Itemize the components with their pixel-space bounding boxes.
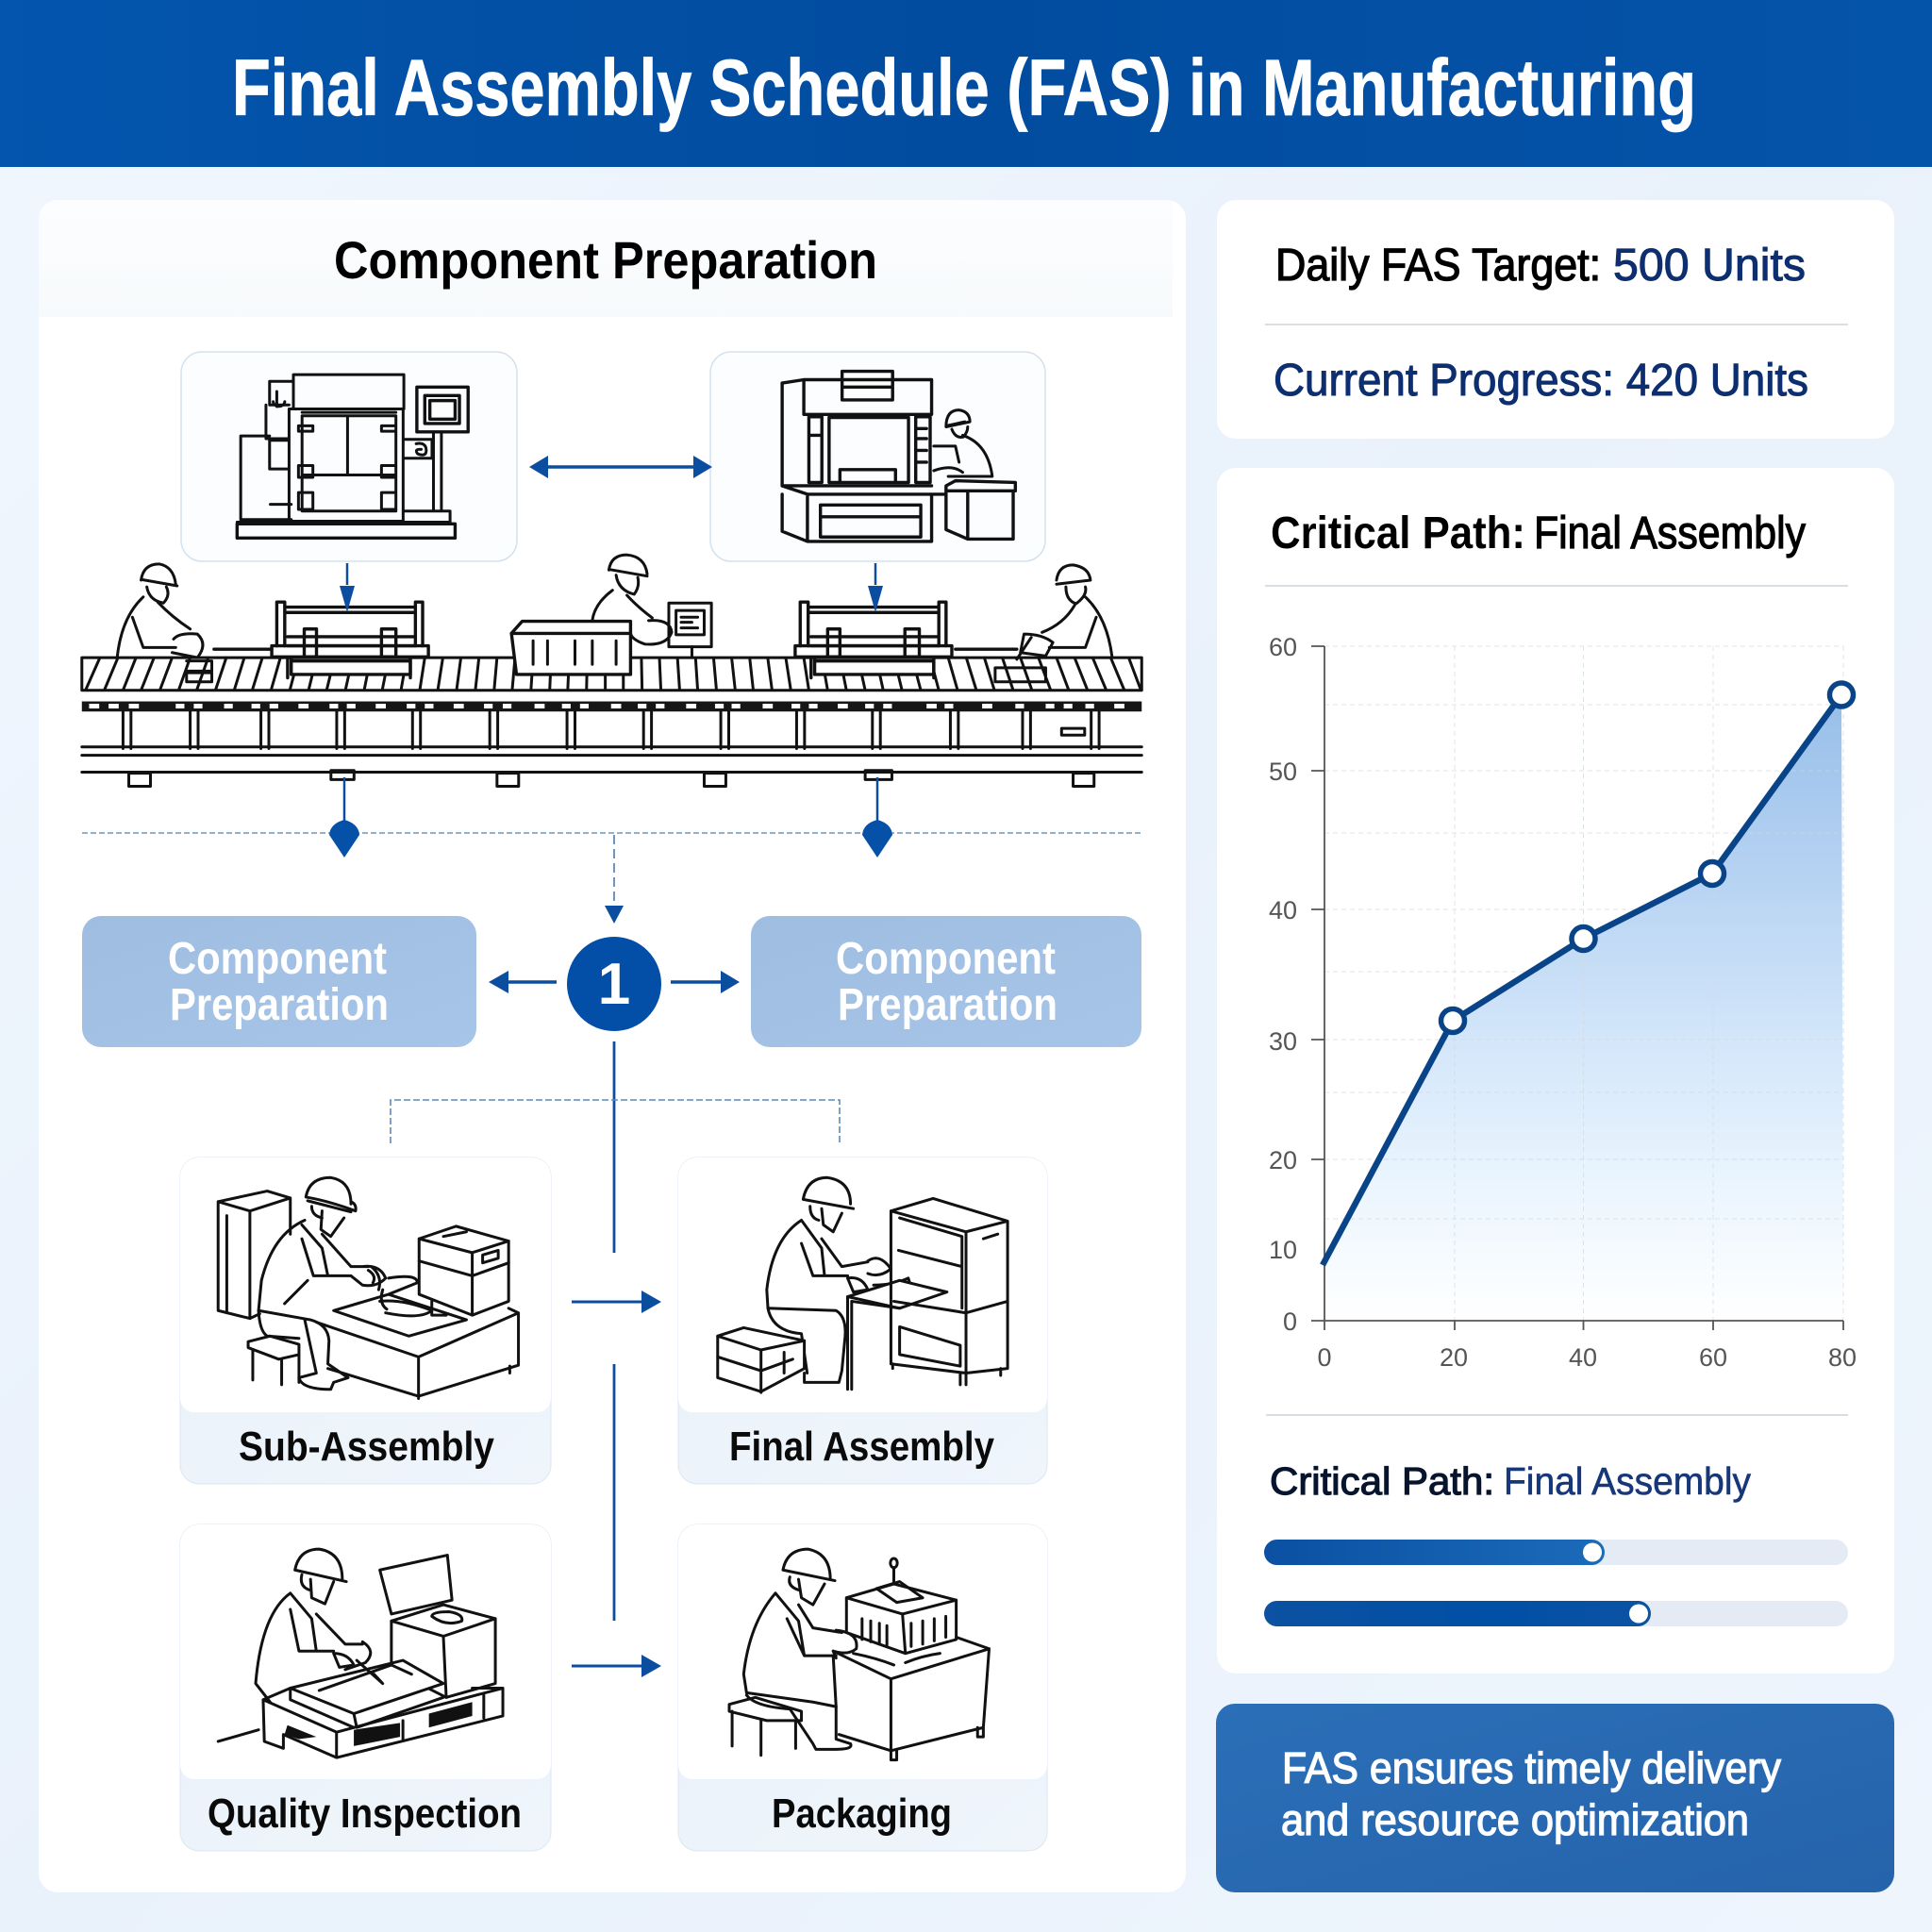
arrow: sub-assembly to final assembly <box>572 1291 661 1313</box>
icon: left machine <box>237 375 468 538</box>
axes <box>1311 646 1843 1330</box>
card: final assembly: Final Assembly <box>729 1424 994 1470</box>
icon: packaging worker <box>729 1549 990 1760</box>
card: sub-assembly: Sub-Assembly <box>239 1424 494 1470</box>
y axis labels <box>1269 633 1297 1336</box>
icon: center crate and monitor <box>511 603 711 675</box>
arrow heads <box>529 456 712 478</box>
box: component preparation left <box>82 916 476 1047</box>
daily target text: Daily FAS Target: <box>1275 241 1601 291</box>
conveyor rail <box>82 702 1141 787</box>
conveyor line art <box>82 372 1141 787</box>
y axis labels: 60 <box>1269 633 1297 661</box>
connector: left drop arrow <box>340 563 355 612</box>
progress heading <box>1270 1459 1751 1503</box>
worker illustrations <box>218 1177 1008 1760</box>
step number badge <box>567 937 661 1031</box>
panel: daily target <box>1217 200 1894 439</box>
box: component preparation right: Preparation <box>838 980 1058 1030</box>
data line <box>1323 694 1841 1265</box>
dashed bracket <box>391 1100 840 1143</box>
y axis labels: 10 <box>1269 1236 1297 1264</box>
daily target text <box>1275 241 1806 291</box>
chart title: Critical Path: <box>1271 508 1525 558</box>
callout: takeaway: FAS ensures timely delivery <box>1282 1743 1781 1792</box>
connector: right drop arrow <box>868 563 883 612</box>
area fill <box>1324 694 1843 1321</box>
callout: takeaway: and resource optimization <box>1281 1795 1749 1844</box>
conveyor belt slats <box>82 658 1141 691</box>
chart title: Final Assembly <box>1534 508 1806 558</box>
header banner <box>0 0 1932 167</box>
y axis labels: 0 <box>1283 1307 1297 1336</box>
x axis labels: 40 <box>1569 1343 1597 1372</box>
dashed distribution line <box>82 832 1141 834</box>
card: final assembly <box>678 1158 1047 1484</box>
y axis labels: 30 <box>1269 1027 1297 1056</box>
left pin marker <box>329 777 359 858</box>
arrow: quality inspection to packaging <box>572 1655 661 1677</box>
daily target text: 500 Units <box>1613 241 1806 291</box>
icon: final assembly worker <box>718 1177 1008 1392</box>
callout: takeaway <box>1216 1704 1894 1892</box>
card: sub-assembly <box>180 1158 551 1484</box>
icon: right worker <box>995 565 1112 682</box>
vertical connector <box>613 1041 615 1621</box>
x axis labels: 0 <box>1317 1343 1332 1372</box>
card: machine left <box>181 352 517 561</box>
icon: right fixture <box>795 602 1017 678</box>
panel: critical path chart <box>1217 468 1894 1674</box>
progress bar 1 <box>1264 1540 1848 1565</box>
panel: process flow <box>39 200 1186 1892</box>
data points <box>1441 683 1853 1032</box>
icon: quality inspection worker <box>218 1549 503 1757</box>
icon: sub-assembly worker <box>218 1177 519 1399</box>
arrow: left <box>489 971 557 993</box>
card: packaging <box>678 1524 1047 1851</box>
icon: right machine with worker <box>782 372 1015 541</box>
current progress text: Current Progress: 420 Units <box>1274 356 1808 406</box>
box: component preparation right: Component <box>836 934 1056 984</box>
dashed arrow to step 1 <box>605 835 624 924</box>
panel heading band: Component Preparation <box>334 230 877 290</box>
icon: left fixture <box>214 602 428 678</box>
icon: center worker <box>592 555 672 644</box>
step number badge: 1 <box>598 952 630 1017</box>
card: quality inspection <box>180 1524 551 1851</box>
box: component preparation left: Preparation <box>170 980 389 1030</box>
card: machine right <box>710 352 1045 561</box>
line chart <box>1269 633 1857 1372</box>
progress bar 2 <box>1264 1601 1848 1626</box>
x axis labels: 80 <box>1828 1343 1857 1372</box>
card: quality inspection: Quality Inspection <box>208 1790 522 1837</box>
chart title <box>1271 508 1806 558</box>
y axis labels: 40 <box>1269 896 1297 924</box>
progress heading: Critical Path: <box>1270 1459 1494 1503</box>
box: component preparation left: Component <box>168 934 387 984</box>
x axis labels: 20 <box>1440 1343 1468 1372</box>
progress heading: Final Assembly <box>1504 1459 1751 1503</box>
box: component preparation right <box>751 916 1141 1047</box>
x axis labels <box>1317 1343 1857 1372</box>
icon: left worker <box>117 564 212 682</box>
arrow: right <box>671 971 740 993</box>
x axis labels: 60 <box>1699 1343 1727 1372</box>
y axis labels: 50 <box>1269 758 1297 786</box>
card: packaging: Packaging <box>772 1790 952 1837</box>
y axis labels: 20 <box>1269 1146 1297 1174</box>
panel heading band <box>39 200 1173 317</box>
double arrow between machines <box>542 465 699 469</box>
right pin marker <box>862 777 892 858</box>
